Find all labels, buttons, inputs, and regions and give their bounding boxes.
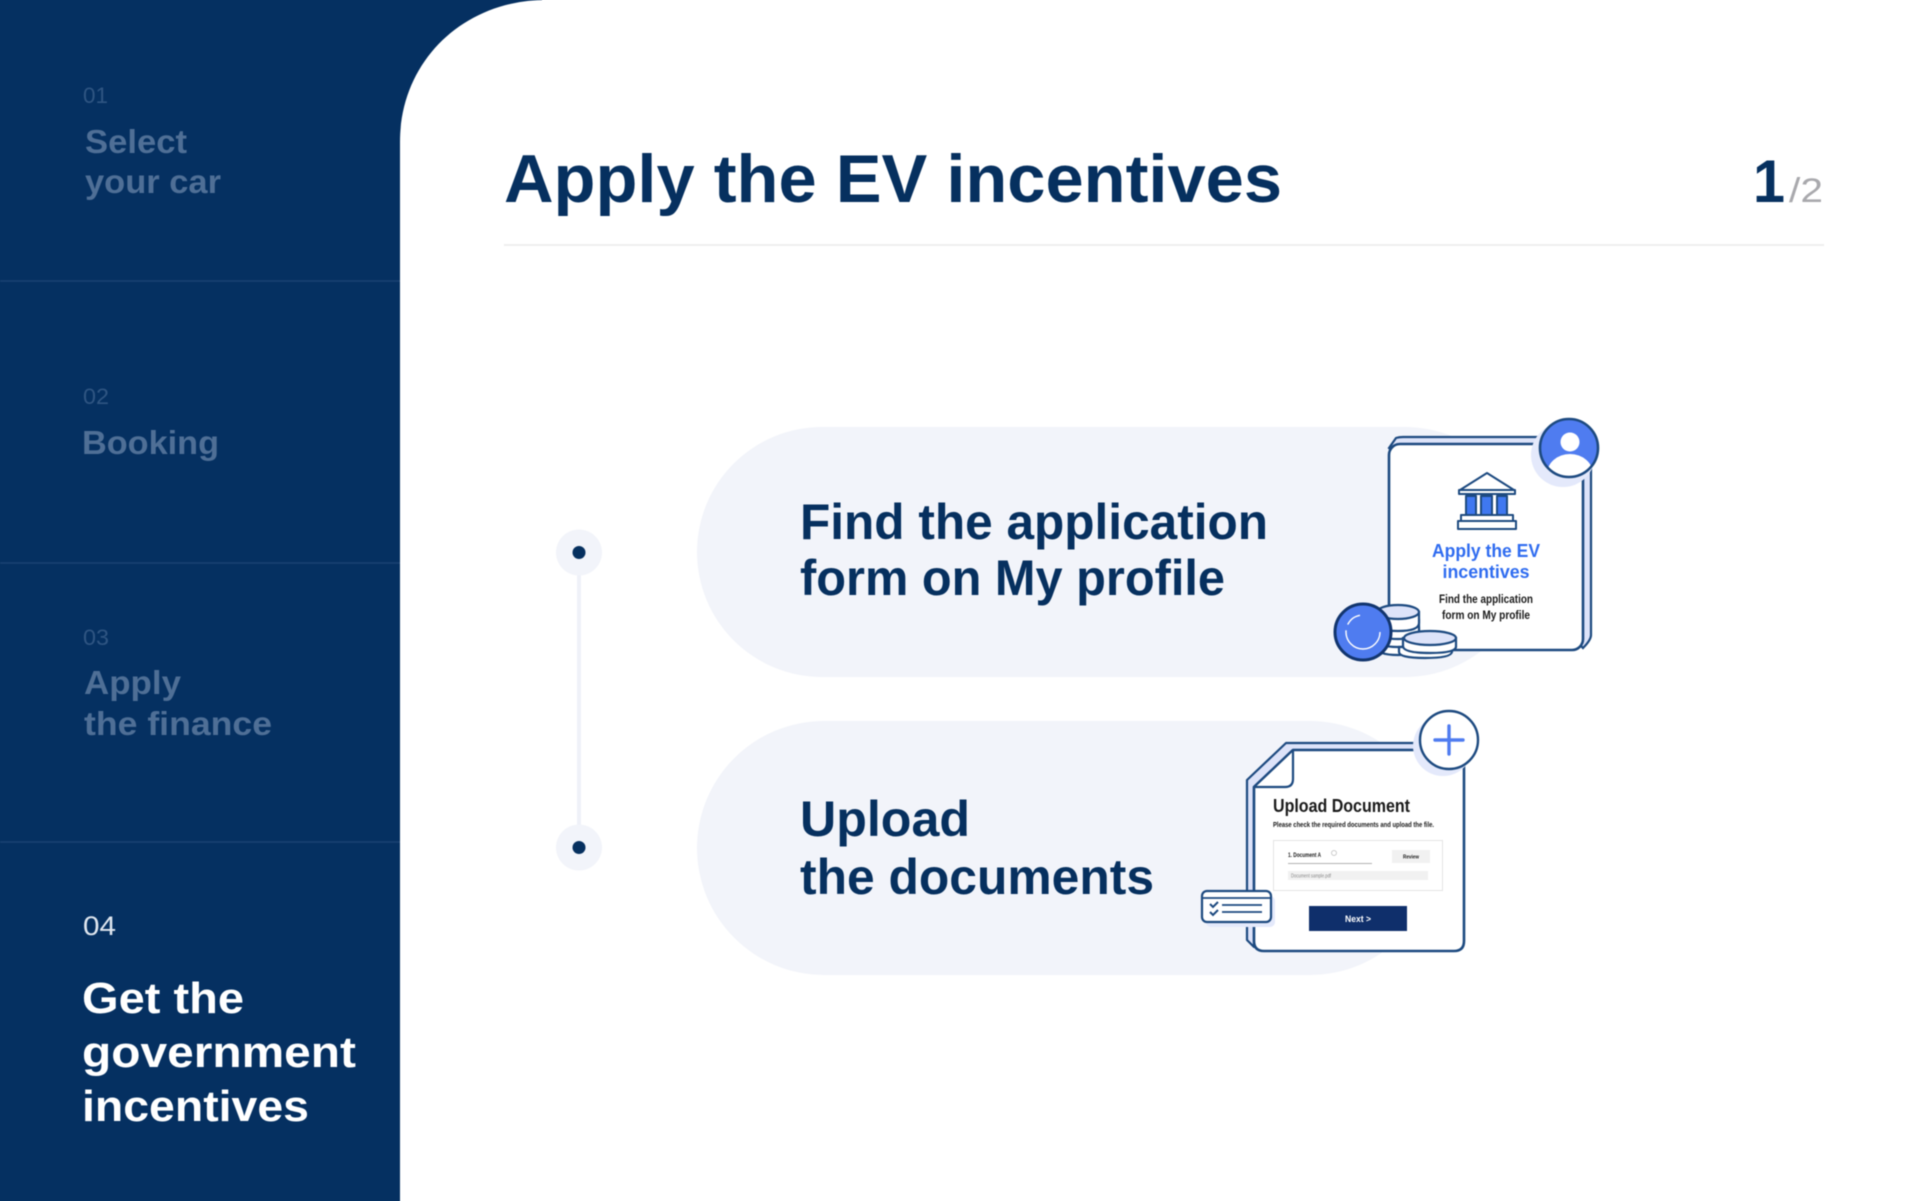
icon: checklist	[1202, 891, 1275, 927]
illustration: upload document page: Upload Document	[1273, 796, 1410, 816]
page indicator: /2	[1789, 172, 1823, 210]
step one text: form on My profile	[800, 550, 1225, 606]
step two text: Upload	[800, 791, 970, 847]
next button	[1309, 906, 1407, 931]
document upload form: Review	[1403, 854, 1419, 860]
step 01: 01	[83, 83, 108, 108]
icon: plus button	[1413, 711, 1478, 776]
title: Apply the EV incentives	[504, 141, 1282, 217]
illustration: profile application card: Apply the EV	[1432, 541, 1540, 561]
illustration: upload document page: Please check the required documents and upload the file.	[1273, 822, 1434, 829]
step 01	[83, 83, 221, 200]
step 02	[82, 384, 219, 461]
step 04 active	[82, 911, 356, 1131]
page indicator	[1753, 148, 1823, 215]
page indicator: 1	[1753, 148, 1785, 215]
step 02: Booking	[82, 424, 219, 461]
icon: user avatar	[1531, 419, 1598, 494]
step 03: Apply	[84, 664, 182, 701]
document upload form	[1274, 840, 1442, 890]
illustration: upload document page	[1202, 711, 1478, 951]
icon: coins	[1335, 604, 1456, 660]
panel: step two card	[697, 711, 1478, 975]
step 04 active: government	[82, 1028, 356, 1077]
step 02: 02	[83, 384, 109, 409]
step 04 active: Get the	[82, 974, 244, 1023]
next button: Next >	[1345, 914, 1371, 924]
illustration: profile application card: incentives	[1442, 562, 1530, 582]
step 04 active: 04	[83, 911, 116, 941]
step two text	[800, 791, 1154, 905]
step 03: 03	[83, 625, 109, 650]
panel: step one card	[697, 419, 1598, 677]
document upload form: 1. Document A	[1288, 852, 1321, 859]
step 01: your car	[85, 163, 221, 200]
step 04 active: incentives	[82, 1082, 309, 1131]
illustration: profile application card: form on My profile	[1442, 610, 1530, 622]
illustration: profile application card: Find the application	[1439, 594, 1533, 606]
timeline	[556, 530, 602, 870]
document upload form: Document sample.pdf	[1291, 874, 1331, 880]
step 01: Select	[85, 123, 187, 160]
step one text: Find the application	[800, 494, 1268, 550]
illustration: profile application card	[1335, 419, 1598, 660]
step two text: the documents	[800, 849, 1154, 905]
icon: bank	[1458, 473, 1516, 529]
step 03: the finance	[84, 705, 272, 742]
step one text	[800, 494, 1268, 606]
step 03	[83, 625, 272, 742]
panel: sidebar steps	[0, 0, 542, 1201]
